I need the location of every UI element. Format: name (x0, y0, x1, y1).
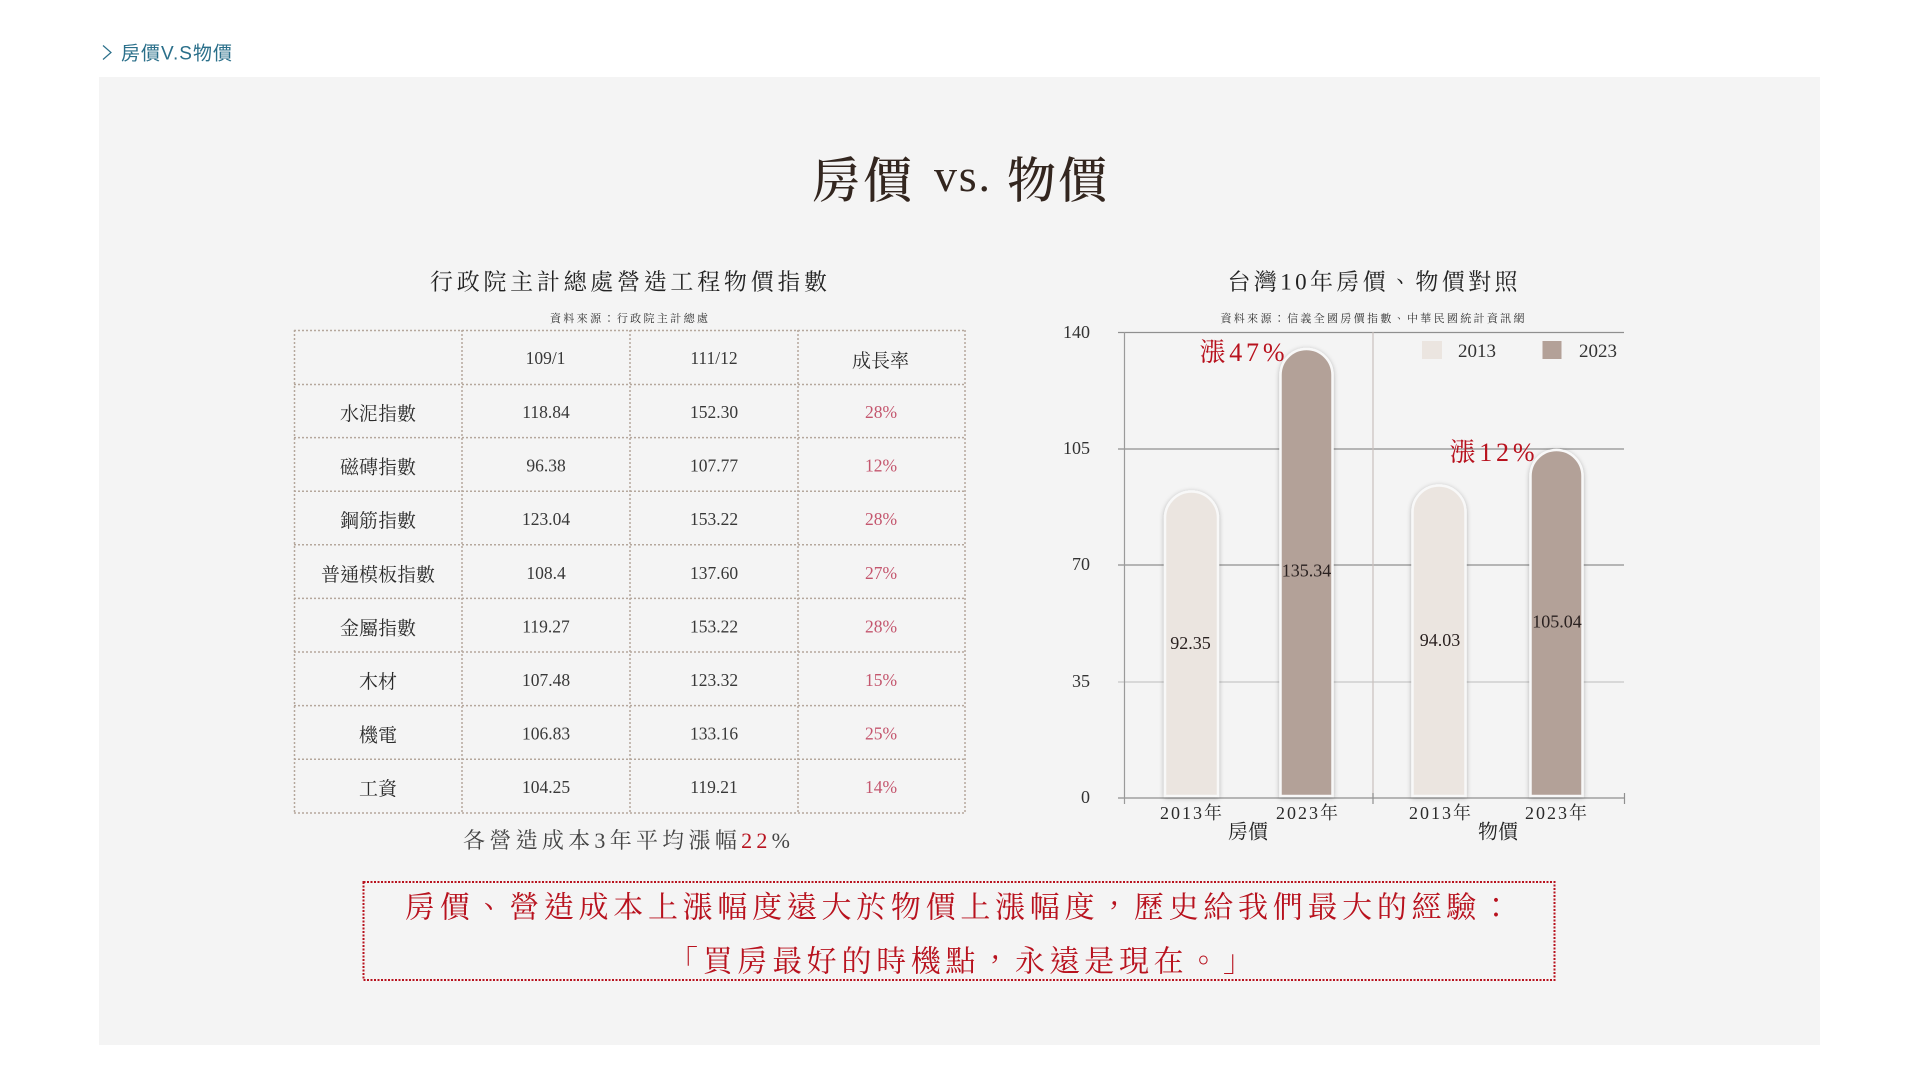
y axis labels: 70 (1072, 554, 1090, 574)
row: 木材: 木材 (359, 671, 397, 693)
panel: construction price index table (294, 270, 965, 813)
breadcrumb heading: 房價V.S物價 (121, 42, 232, 64)
chart source note: 資料來源：信義全國房價指數、中華民國統計資訊網 (1220, 311, 1524, 325)
y axis labels: 105 (1063, 438, 1090, 458)
title: vs. (934, 150, 990, 201)
row: 普通模板指數: 108.4 (526, 563, 566, 583)
row: 磁磚指數: 107.77 (690, 456, 738, 476)
row: 磁磚指數: 12% (865, 456, 897, 476)
row: 鋼筋指數: 123.04 (522, 509, 570, 529)
x axis year labels: 2023年 (1525, 802, 1589, 823)
row: 金屬指數: 153.22 (690, 616, 738, 636)
table header row (526, 348, 909, 372)
legend: 2013 (1458, 341, 1496, 362)
bar: 房價 2023 (1280, 349, 1332, 796)
row: 機電: 機電 (359, 725, 397, 747)
row: 金屬指數: 金屬指數 (340, 617, 416, 639)
row: 磁磚指數: 96.38 (526, 456, 566, 476)
row: 工資: 119.21 (690, 777, 738, 797)
table heading: 行政院主計總處營造工程物價指數 (430, 270, 827, 294)
row: 金屬指數: 119.27 (522, 616, 570, 636)
bar: 物價 2023: 105.04 (1532, 612, 1582, 632)
x axis group labels: 物價 (1478, 820, 1520, 844)
panel: ten-year bar chart (1063, 270, 1624, 844)
row: 水泥指數: 152.30 (690, 402, 738, 422)
callout: 物價 increase: 漲12% (1450, 438, 1534, 467)
row: 水泥指數: 水泥指數 (340, 403, 416, 425)
row: 木材 (359, 670, 897, 693)
row: 磁磚指數 (340, 456, 897, 479)
conclusion line 2: 「買房最好的時機點，永遠是現在。」 (668, 946, 1253, 978)
bar: 物價 2013: 94.03 (1420, 630, 1460, 650)
row: 工資: 14% (865, 777, 897, 797)
row: 鋼筋指數 (340, 509, 897, 532)
row: 鋼筋指數: 153.22 (690, 509, 738, 529)
row: 金屬指數: 28% (865, 616, 897, 636)
conclusion line 1: 房價、營造成本上漲幅度遠大於物價上漲幅度，歷史給我們最大的經驗： (405, 892, 1511, 924)
row: 普通模板指數: 普通模板指數 (321, 564, 435, 586)
row: 木材: 15% (865, 670, 897, 690)
row: 木材: 107.48 (522, 670, 570, 690)
row: 水泥指數: 28% (865, 402, 897, 422)
y axis labels: 140 (1063, 322, 1090, 342)
x axis group labels: 房價 (1228, 820, 1270, 844)
row: 金屬指數 (340, 616, 897, 639)
callout: conclusion box (364, 882, 1554, 980)
row: 鋼筋指數: 鋼筋指數 (340, 510, 416, 532)
bar: 物價 2013 (1412, 486, 1466, 796)
bar: 房價 2023: 135.34 (1282, 560, 1331, 580)
x axis year labels: 2013年 (1160, 802, 1224, 823)
row: 機電: 133.16 (690, 724, 738, 744)
x axis year labels: 2013年 (1409, 802, 1473, 823)
row: 機電: 25% (865, 724, 897, 744)
y axis labels: 0 (1081, 787, 1090, 807)
row: 機電: 106.83 (522, 724, 570, 744)
row: 磁磚指數: 磁磚指數 (340, 457, 416, 479)
table header row: 成長率 (852, 350, 909, 372)
callout: 房價 increase: 漲47% (1200, 338, 1284, 367)
x axis group labels (1228, 820, 1520, 844)
chart gridlines and axes (1118, 332, 1624, 804)
row: 水泥指數 (340, 402, 897, 425)
row: 木材: 123.32 (690, 670, 738, 690)
y axis labels (1063, 322, 1090, 807)
x axis year labels: 2023年 (1276, 802, 1340, 823)
legend: 2023 (1579, 341, 1617, 362)
chart heading: 台灣10年房價、物價對照 (1228, 270, 1518, 294)
row: 機電 (359, 724, 897, 747)
row: 普通模板指數: 27% (865, 563, 897, 583)
row: 普通模板指數 (321, 563, 897, 586)
table grid (294, 330, 965, 813)
row: 普通模板指數: 137.60 (690, 563, 738, 583)
bar: 房價 2013: 92.35 (1170, 633, 1211, 653)
panel: main background (99, 77, 1820, 1045)
table header row: 109/1 (526, 348, 565, 368)
legend (1422, 341, 1617, 362)
bar: 房價 2013 (1165, 492, 1218, 796)
row: 工資: 工資 (359, 778, 398, 800)
title (812, 150, 1112, 208)
table header row: 111/12 (690, 348, 738, 368)
table footnote: average increase: 各營造成本3年平均漲幅22% (463, 828, 790, 853)
bar: 物價 2023 (1530, 450, 1582, 796)
row: 水泥指數: 118.84 (522, 402, 570, 422)
icon: chevron (103, 46, 111, 60)
y axis labels: 35 (1072, 671, 1090, 691)
row: 鋼筋指數: 28% (865, 509, 897, 529)
title: 物價 (1007, 154, 1112, 208)
row: 工資 (359, 777, 897, 800)
row: 工資: 104.25 (522, 777, 570, 797)
table source note: 資料來源：行政院主計總處 (550, 311, 708, 325)
title: 房價 (812, 154, 917, 208)
x axis year labels (1160, 802, 1589, 823)
